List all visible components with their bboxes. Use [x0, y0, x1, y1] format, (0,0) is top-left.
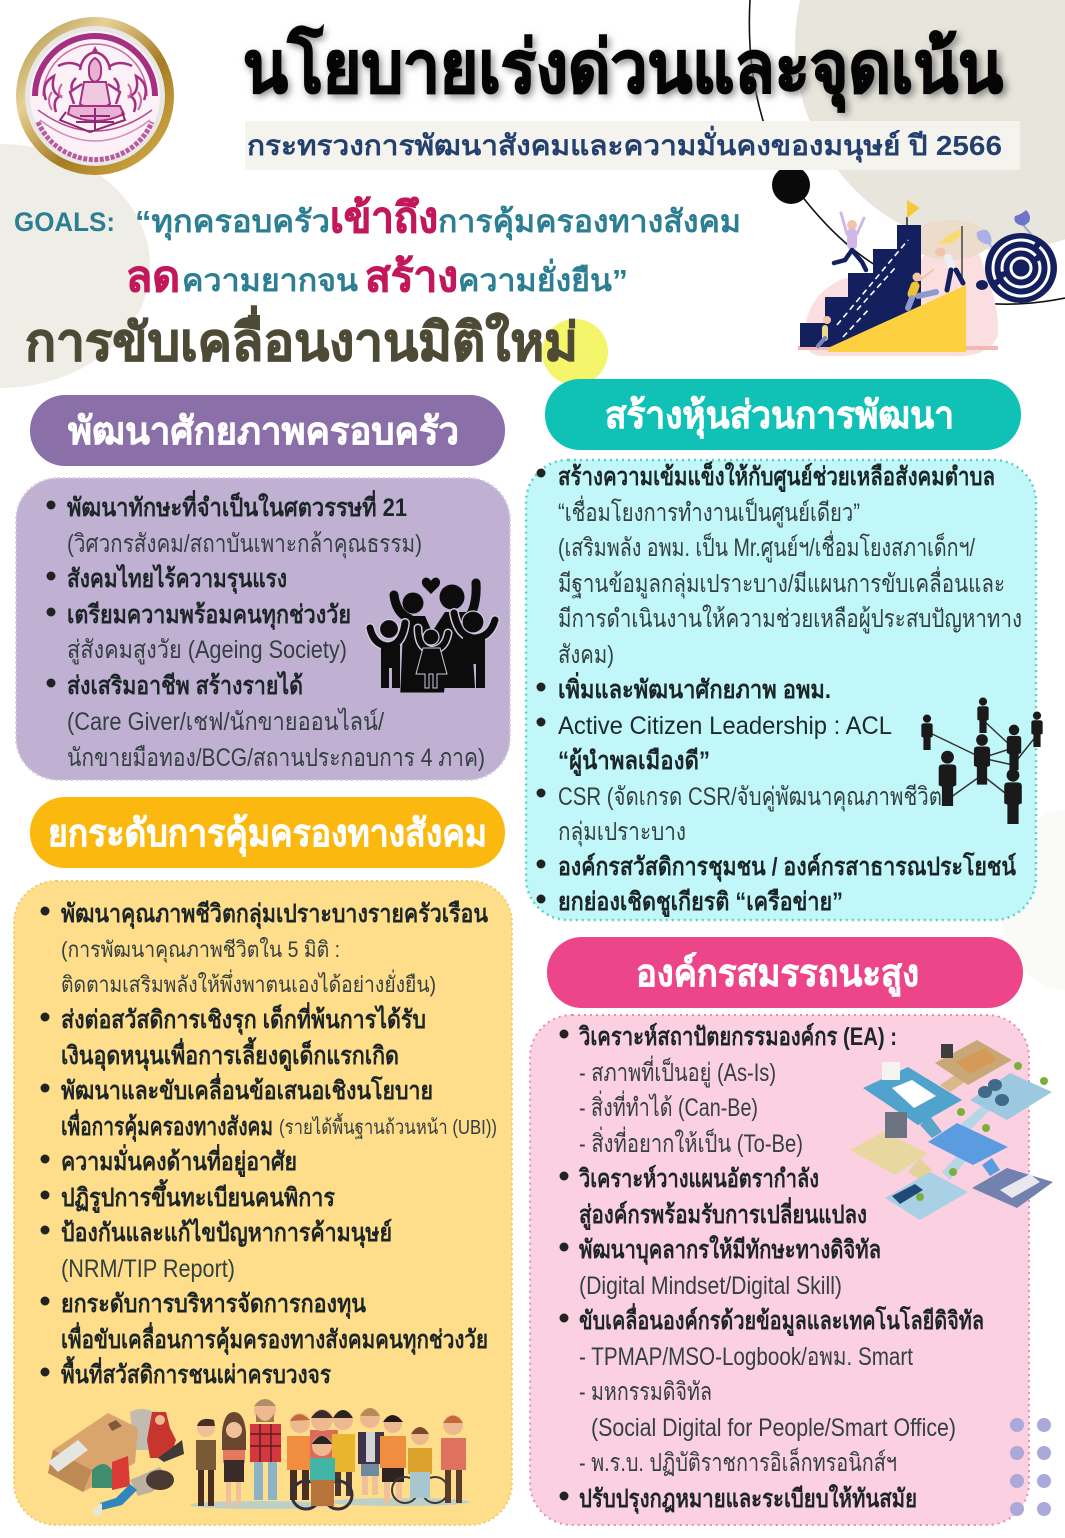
- bullets and text: high performance organization: - TPMAP/MSO-Logbook/อพม. Smart: [579, 1343, 913, 1371]
- bullets and text: high performance organization: วิเคราะห์สถาปัตยกรรมองค์กร (EA) :: [578, 1022, 897, 1051]
- heading pill: family potential: [30, 395, 505, 466]
- title: นโยบายเร่งด่วนและจุดเน้น: [245, 27, 1007, 116]
- bullets and text: social protection: เงินอุดหนุนเพื่อการเลี้ยงดูเด็กแรกเกิด: [61, 1036, 399, 1072]
- person 10: [441, 1415, 466, 1503]
- bullets and text: development partners: เพิ่มและพัฒนาศักยภาพ อพม.: [558, 672, 831, 704]
- bullets and text: development partners: กลุ่มเปราะบาง: [558, 818, 686, 847]
- bullets and text: social protection: (NRM/TIP Report): [61, 1255, 235, 1283]
- bullets and text: social protection: ติดตามเสริมพลังให้พึ่งพาตนเองได้อย่างยั่งยืน): [61, 969, 436, 997]
- goals statement: GOALS:: [14, 207, 115, 237]
- bullets and text: social protection: (รายได้พื้นฐานถ้วนหน้า (UBI)): [279, 1113, 497, 1139]
- heading pill: social protection: [30, 797, 505, 868]
- heading pill: high performance organization: องค์กรสมรรถนะสูง: [636, 952, 919, 997]
- bullets and text: high performance organization: - สิ่งที่ทำได้ (Can-Be): [579, 1090, 758, 1122]
- heading pill: development partners: [545, 379, 1021, 450]
- heading pill: development partners: สร้างหุ้นส่วนการพัฒนา: [605, 395, 954, 439]
- bullets and text: social protection: ส่งต่อสวัสดิการเชิงรุก เด็กที่พ้นการได้รับ: [61, 1002, 426, 1036]
- subtitle: [245, 121, 1020, 170]
- bullets and text: family potential: เตรียมความพร้อมคนทุกช่วงวัย: [67, 601, 351, 631]
- bullets and text: social protection: ป้องกันและแก้ไขปัญหาการค้ามนุษย์: [61, 1217, 392, 1249]
- decorative arc with black ball: [749, 0, 1065, 304]
- illustration: diverse group of people: [190, 1399, 470, 1509]
- bullets and text: high performance organization: [560, 1022, 984, 1515]
- bullets and text: high performance organization: - มหกรรมดิจิทัล: [579, 1378, 712, 1406]
- left child: [370, 620, 405, 688]
- bullets and text: development partners: [536, 461, 1022, 918]
- icon: people network: [921, 698, 1043, 824]
- scroll banner: [38, 110, 152, 131]
- bullets and text: family potential: พัฒนาทักษะที่จำเป็นในศตวรรษที่ 21: [67, 490, 407, 522]
- subtitle: กระทรวงการพัฒนาสังคมและความมั่นคงของมนุษย์ ปี 2566: [247, 125, 1002, 163]
- goals statement: สร้าง: [365, 253, 458, 300]
- illustration: homeless people: [48, 1409, 184, 1517]
- heading pill: high performance organization: [547, 937, 1023, 1008]
- panel: social protection: [14, 881, 512, 1525]
- title: นโยบายเร่งด่วนและจุดเน้น: [243, 24, 1003, 113]
- bullets and text: family potential: สังคมไทยไร้ความรุนแรง: [67, 563, 287, 595]
- top pink arc: [35, 36, 155, 96]
- icon: family: [370, 578, 495, 688]
- bullets and text: family potential: (Care Giver/เชฟ/นักขายออนไลน์/: [67, 707, 384, 736]
- goals statement: การคุ้มครองทางสังคม: [438, 204, 741, 241]
- bullets and text: social protection: ยกระดับการบริหารจัดการกองทุน: [61, 1290, 366, 1320]
- person 1: [196, 1419, 216, 1506]
- heading pill: family potential: พัฒนาศักยภาพครอบครัว: [68, 411, 459, 453]
- bullets and text: high performance organization: (Digital Mindset/Digital Skill): [579, 1272, 842, 1300]
- bullets and text: family potential: นักขายมือทอง/BCG/สถานประกอบการ 4 ภาค): [67, 744, 485, 772]
- bullets and text: social protection: เพื่อการคุ้มครองทางสังคม: [61, 1109, 273, 1143]
- person 2: [222, 1412, 246, 1506]
- bullets and text: social protection: พัฒนาและขับเคลื่อนข้อเสนอเชิงนโยบาย: [61, 1073, 433, 1105]
- center girl: [416, 628, 448, 688]
- bullets and text: development partners: CSR (จัดเกรด CSR/จับคู่พัฒนาคุณภาพชีวิต: [558, 783, 942, 812]
- bullets and text: development partners: สังคม): [558, 641, 614, 669]
- goals statement: [14, 194, 741, 300]
- bullets and text: social protection: ความมั่นคงด้านที่อยู่อาศัย: [61, 1144, 297, 1178]
- heading pill: social protection: ยกระดับการคุ้มครองทางสังคม: [48, 813, 487, 857]
- goals statement: ความยั่งยืน”: [458, 258, 628, 298]
- panel: development partners: [526, 460, 1043, 920]
- bullets and text: social protection: พัฒนาคุณภาพชีวิตกลุ่มเปราะบางรายครัวเรือน: [61, 900, 488, 930]
- bullets and text: development partners: “เชื่อมโยงการทำงานเป็นศูนย์เดียว”: [558, 495, 860, 528]
- goals statement: ลด: [126, 253, 180, 300]
- right child: [454, 611, 495, 688]
- section heading: new dimension: การขับเคลื่อนงานมิติใหม่: [25, 306, 578, 372]
- person 7: [358, 1408, 384, 1495]
- bullets and text: social protection: ปฏิรูปการขึ้นทะเบียนคนพิการ: [61, 1178, 335, 1214]
- bullets and text: high performance organization: - สิ่งที่อยากให้เป็น (To-Be): [579, 1126, 803, 1158]
- bullets and text: development partners: ยกย่องเชิดชูเกียรติ “เครือข่าย”: [558, 888, 843, 918]
- panel: family potential: [16, 478, 510, 780]
- goals statement: “ทุกครอบครัว: [135, 204, 330, 241]
- bullets and text: development partners: “ผู้นำพลเมืองดี”: [558, 747, 710, 777]
- panel: high performance organization: [530, 1015, 1053, 1525]
- bullets and text: social protection: [40, 900, 497, 1389]
- deity: [91, 46, 99, 54]
- illustration: stairs, climbers and target: [798, 200, 1057, 356]
- adults: [394, 583, 476, 688]
- bullets and text: family potential: (วิศวกรสังคม/สถาบันเพาะกล้าคุณธรรม): [67, 530, 422, 559]
- person 9 in wheelchair: [392, 1427, 448, 1503]
- decorative dots: [1010, 1418, 1051, 1516]
- person 5: [310, 1409, 338, 1460]
- bullets and text: social protection: พื้นที่สวัสดิการชนเผ่าครบวงจร: [61, 1355, 331, 1389]
- bullets and text: high performance organization: - พ.ร.บ. ปฏิบัติราชการอิเล็กทรอนิกส์ฯ: [579, 1447, 897, 1477]
- person 8: [380, 1415, 406, 1503]
- bullets and text: high performance organization: (Social Digital for People/Smart Office): [591, 1414, 956, 1442]
- bullets and text: high performance organization: วิเคราะห์วางแผนอัตรากำลัง: [578, 1164, 819, 1193]
- logo: ministry seal: [16, 17, 174, 175]
- person 6: [332, 1410, 355, 1496]
- bullets and text: development partners: Active Citizen Leadership : ACL: [558, 712, 892, 740]
- background: beige shapes: [0, 0, 1065, 990]
- bullets and text: family potential: ส่งเสริมอาชีพ สร้างรายได้: [67, 670, 303, 700]
- bullets and text: high performance organization: ปรับปรุงกฎหมายและระเบียบให้ทันสมัย: [579, 1483, 917, 1515]
- bullets and text: social protection: (การพัฒนาคุณภาพชีวิตใน 5 มิติ :: [61, 937, 340, 963]
- ornament flames: [44, 63, 146, 112]
- bullets and text: social protection: เพื่อขับเคลื่อนการคุ้มครองทางสังคมคนทุกช่วงวัย: [61, 1322, 488, 1356]
- bullets and text: family potential: สู่สังคมสูงวัย (Ageing Society): [67, 636, 347, 665]
- bullets and text: high performance organization: - สภาพที่เป็นอยู่ (As-Is): [579, 1055, 776, 1088]
- bullets and text: family potential: [46, 490, 485, 772]
- person 3: [250, 1399, 281, 1500]
- bullets and text: high performance organization: พัฒนาบุคลากรให้มีทักษะทางดิจิทัล: [579, 1234, 881, 1266]
- bullets and text: high performance organization: สู่องค์กรพร้อมรับการเปลี่ยนแปลง: [579, 1197, 867, 1231]
- front person in wheelchair: [292, 1436, 352, 1509]
- illustration: isometric office floors: [850, 1040, 1053, 1220]
- person 4: [287, 1413, 312, 1500]
- goals statement: เข้าถึง: [330, 194, 438, 241]
- goals statement: ความยากจน: [182, 263, 358, 298]
